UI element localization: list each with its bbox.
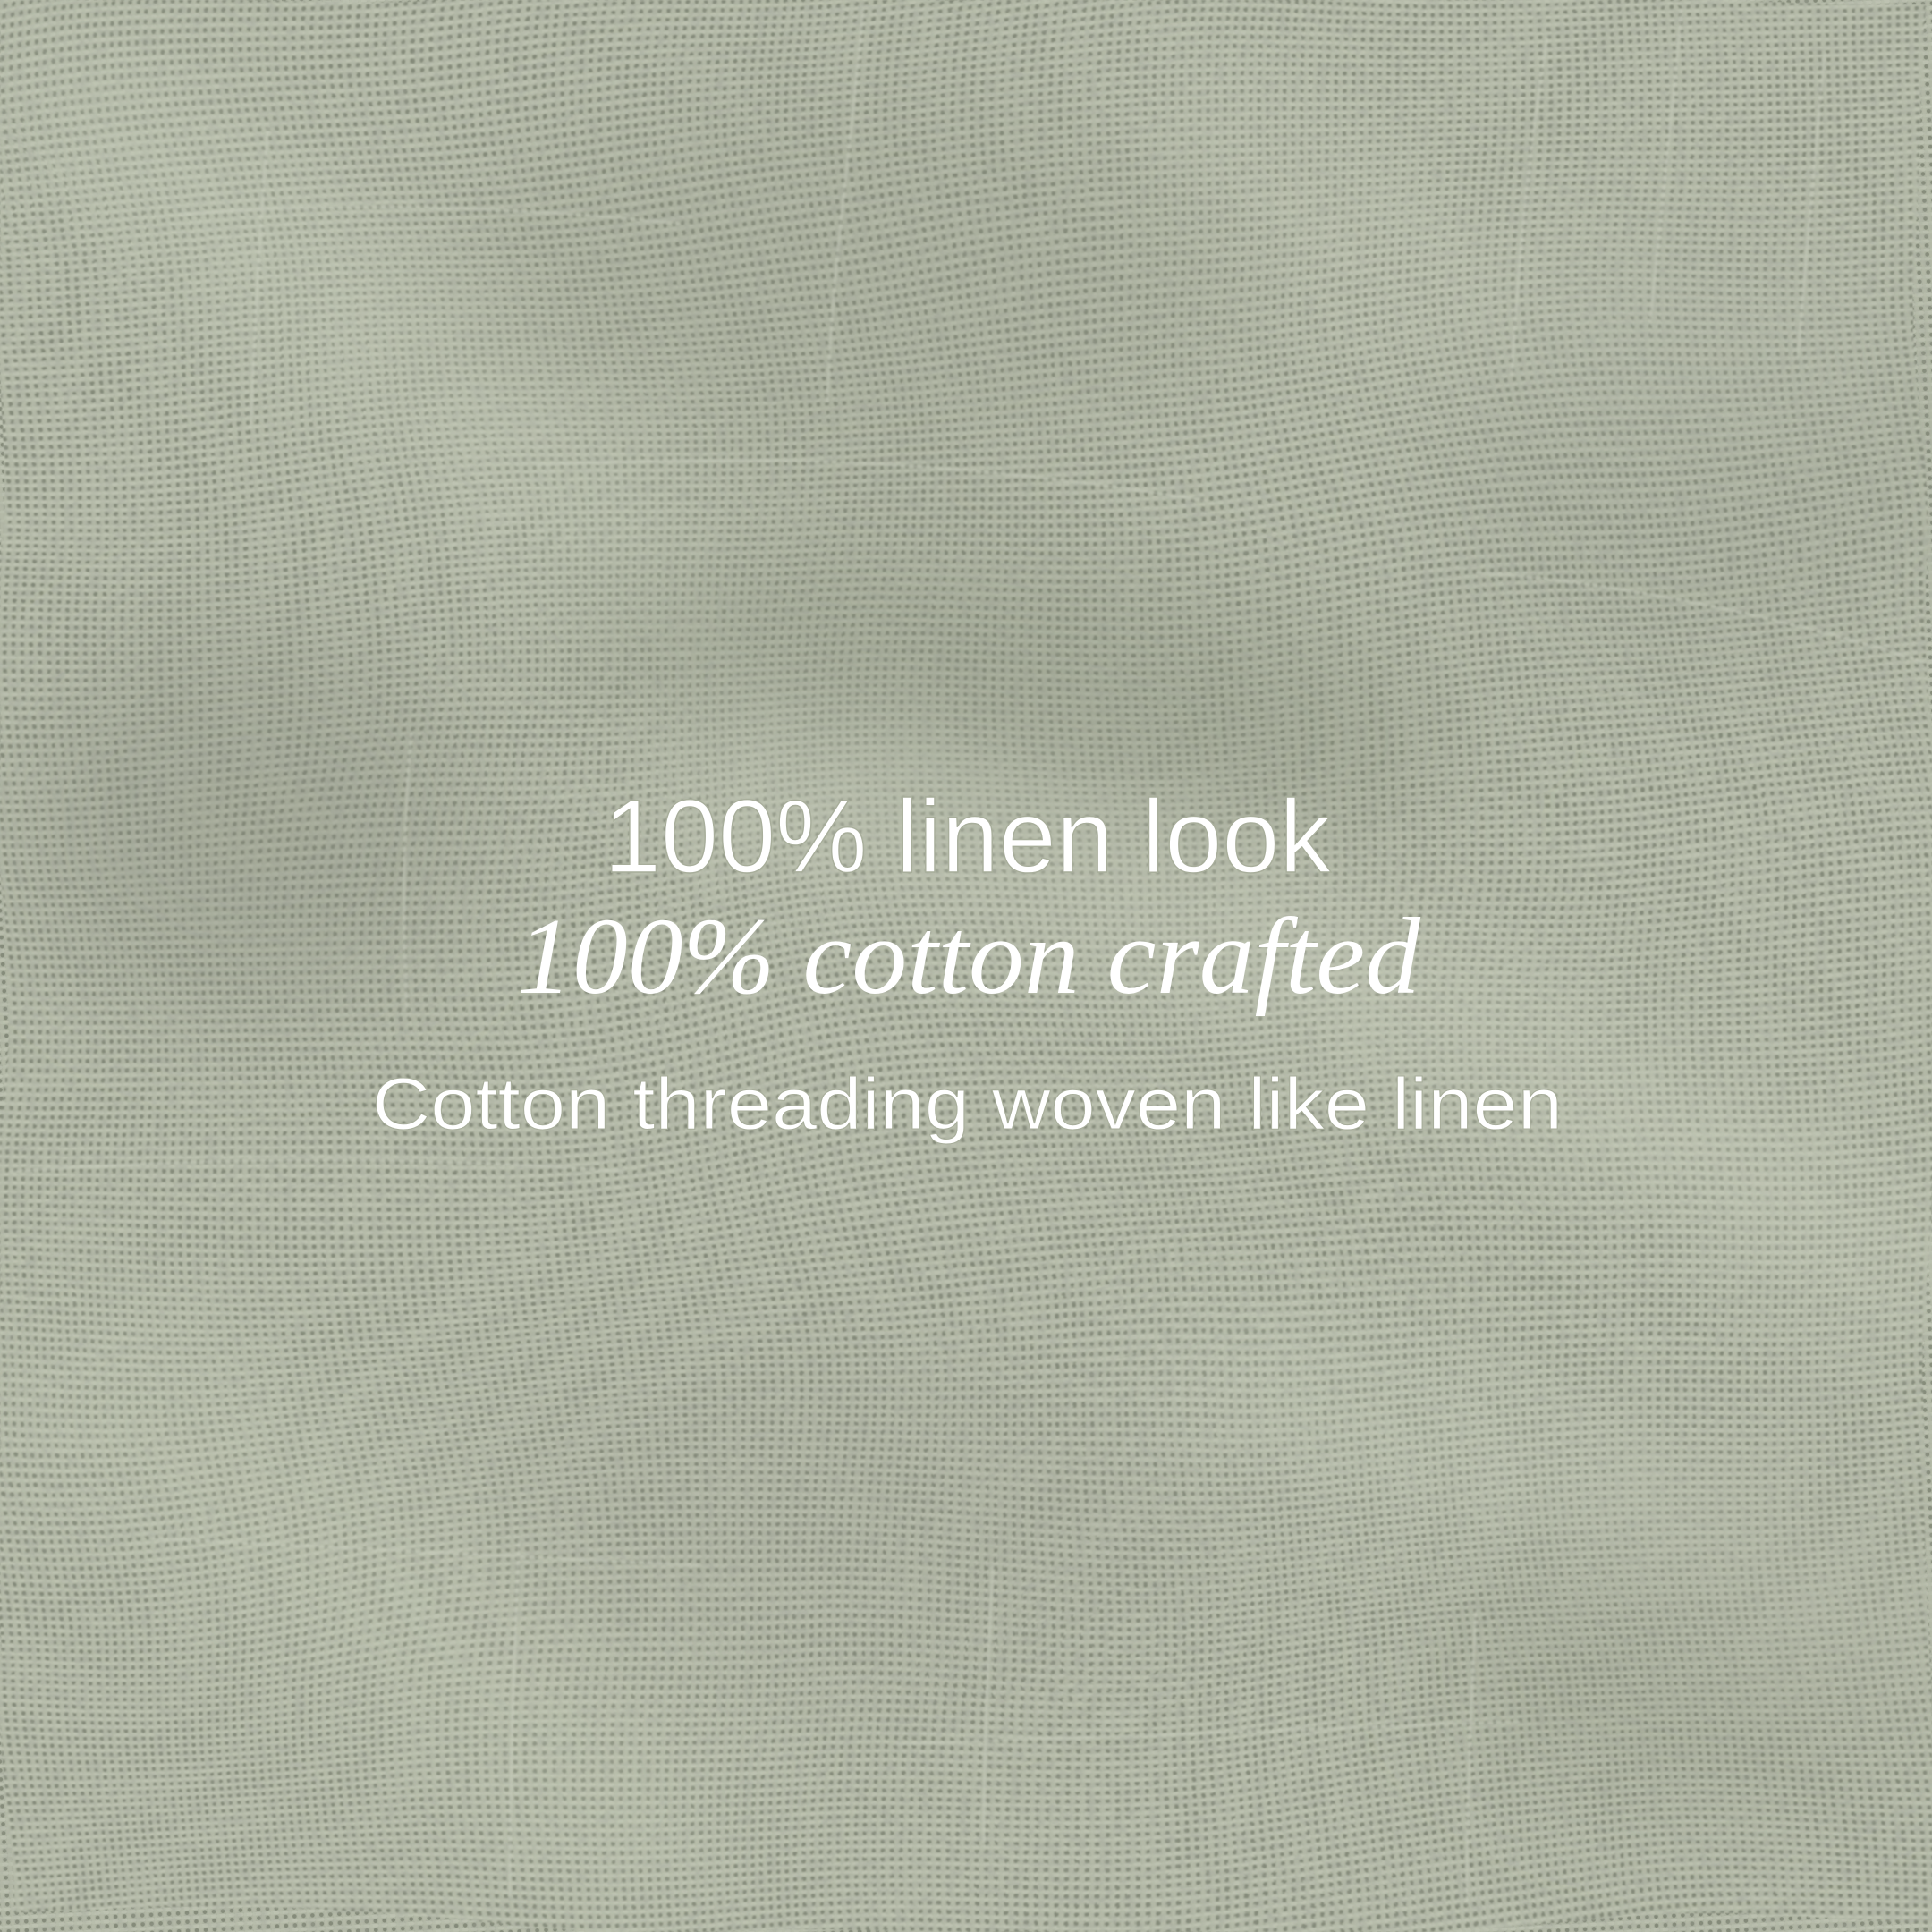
headline: 100% linen look: 100% linen look [604, 778, 1332, 894]
headline: 100% cotton crafted: 100% cotton crafted [517, 896, 1421, 1017]
subheading: Cotton threading woven like linen: Cotton threading woven like linen [372, 1063, 1563, 1145]
